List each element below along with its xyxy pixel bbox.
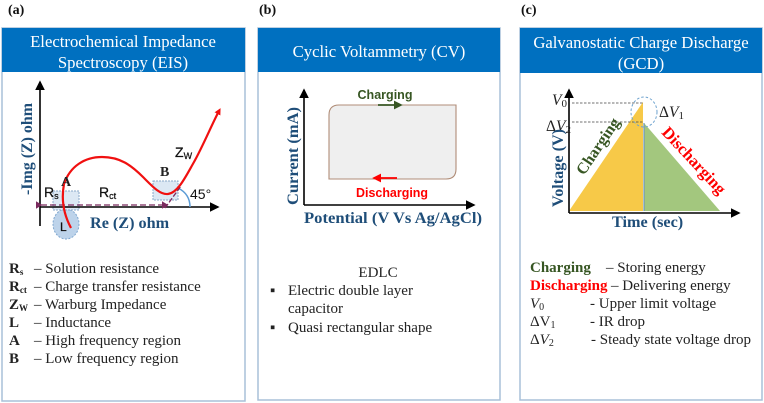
region A box [53,191,79,210]
voltage labels: ΔV [546,118,565,135]
curve labels: ct [109,191,117,201]
tangent line [165,186,181,208]
dashed resistance line [41,204,167,206]
legend: EIS: – Low frequency region [33,351,179,367]
legend: EIS [9,261,201,367]
chart: charge discharge [546,90,739,231]
charging arrow [378,104,401,106]
legend: EIS: – Charge transfer resistance [33,279,201,295]
curve labels: R [44,184,54,200]
text: EDLC: Electric double layer [288,283,413,299]
legend: GCD: 2 [549,338,554,349]
heading: GCD [520,28,762,73]
chart: Nyquist plot [18,82,219,239]
region B box [153,181,178,200]
legend: GCD: 1 [550,320,555,331]
text: EDLC: capacitor [288,301,343,317]
heading: GCD: (GCD) [618,54,664,73]
text: EDLC: ▪ [270,283,275,299]
x axis title: Potential (V Vs Ag/AgCl) [304,209,482,227]
legend: GCD: – Delivering energy [610,278,731,294]
voltage labels: V [552,92,563,109]
dashed guides [572,103,643,122]
curve labels: s [54,191,59,201]
y axis title: Voltage (V) [549,129,567,207]
heading: CV: Cyclic Voltammetry (CV) [293,42,465,61]
legend: EIS: Z [9,297,28,313]
panel: GCD [520,28,762,400]
curve labels: B [160,165,169,180]
discharging triangle [644,123,720,211]
panel label a: (a) [8,3,25,18]
legend: GCD: ΔV [530,314,550,330]
IR drop circle [631,97,657,127]
discharging label: Discharging [658,123,731,199]
legend: EIS: R [9,279,27,295]
axes [304,90,474,205]
panel: CV [258,28,500,400]
legend: EIS: ct [20,285,27,295]
chart: voltammogram [284,87,482,227]
charging label: Charging [358,87,413,102]
discharging label: Discharging [356,185,428,200]
legend: GCD: Charging [530,260,591,276]
legend: EIS: W [19,303,28,313]
legend: EIS: A [9,333,20,349]
panel: EIS [2,28,245,401]
heading: EIS: Electrochemical Impedance [30,32,216,51]
legend: GCD: - Upper limit voltage [590,296,717,312]
axes [40,82,218,226]
legend: EIS: R [9,261,24,277]
legend: EIS: – Warburg Impedance [33,297,167,313]
voltage labels: ΔV [659,104,678,121]
text: EDLC: Quasi rectangular shape [288,320,432,336]
curve labels: 45° [190,186,211,202]
legend: GCD: – Storing energy [605,260,706,276]
x axis title: Time (sec) [612,213,683,231]
legend: EIS: – High frequency region [33,333,182,349]
legend: GCD: Discharging [530,278,608,294]
legend: GCD [530,260,751,349]
legend: EIS: L [9,315,19,331]
legend: EIS: B [9,351,19,367]
panel label c: (c) [521,3,537,18]
heading: EIS [2,28,245,72]
legend: EIS: s [20,267,24,277]
legend: GCD: - Steady state voltage drop [591,332,751,348]
heading: CV [258,28,500,72]
charging label: Charging [573,115,624,178]
voltage labels [546,92,684,136]
region L [53,209,79,239]
curve labels: Z [175,144,184,160]
curve labels: R [99,184,109,200]
CV loop [329,105,456,179]
heading: GCD: Galvanostatic Charge Discharge [533,33,749,52]
legend: GCD: 0 [539,302,544,313]
axes [569,90,739,213]
curve labels: A [61,175,72,190]
text: EDLC: EDLC [358,265,398,281]
y axis title: Current (mA) [284,107,302,205]
y axis title: -Img (Z) ohm [18,103,36,195]
curve labels: L [60,220,67,234]
curve labels: W [184,151,193,161]
legend: GCD: ΔV [530,332,549,348]
curve labels [44,144,211,234]
panel label b: (b) [259,3,276,18]
text: EDLC [270,265,432,336]
voltage labels: 1 [678,110,684,122]
x axis title: Re (Z) ohm [90,214,170,232]
impedance curve [63,111,219,228]
voltage labels: 2 [565,124,571,136]
heading: EIS: Spectroscopy (EIS) [58,53,188,72]
legend: EIS: – Solution resistance [33,261,159,277]
angle arc [178,188,190,207]
text: EDLC: ▪ [270,320,275,336]
legend: GCD: - IR drop [590,314,645,330]
divider [643,123,645,211]
discharging arrow [374,177,397,179]
legend: EIS: – Inductance [33,315,111,331]
legend: GCD: V [530,296,541,312]
voltage labels: 0 [561,98,567,110]
charging triangle [569,102,643,211]
